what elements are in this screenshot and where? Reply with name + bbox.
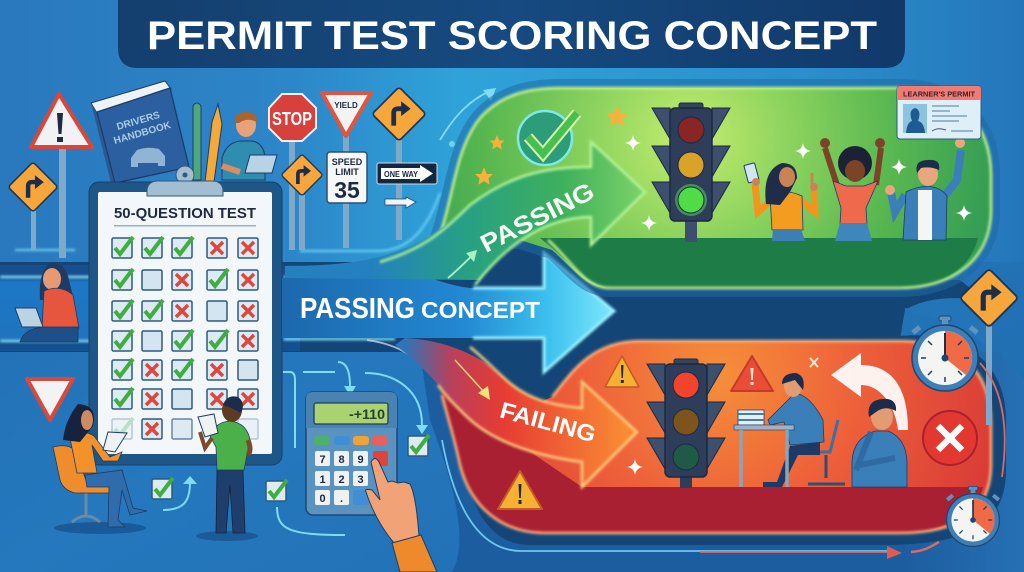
calculator keys bbox=[314, 436, 388, 505]
passing label: PASSING bbox=[476, 177, 599, 259]
sign: lower yield bbox=[27, 379, 73, 420]
sign: speed limit 35: 35 bbox=[334, 177, 360, 203]
fail x badge bbox=[923, 411, 977, 465]
calculator keys: . bbox=[340, 493, 343, 505]
sign: stop: STOP bbox=[272, 109, 312, 129]
red traffic light bbox=[647, 359, 725, 488]
calculator keys: 7 bbox=[319, 454, 326, 466]
calculator keys: 9 bbox=[357, 454, 364, 466]
clipboard bbox=[89, 166, 282, 465]
sign: speed limit 35 bbox=[327, 152, 367, 203]
sign: speed limit 35: SPEED bbox=[332, 157, 363, 167]
learner's permit card bbox=[897, 86, 981, 139]
learner's permit card: LEARNER'S PERMIT bbox=[903, 90, 975, 98]
drivers handbook bbox=[91, 81, 189, 183]
calculator keys: 3 bbox=[357, 474, 364, 486]
test heading: 50-QUESTION TEST bbox=[114, 205, 256, 222]
celebrating man with permit bbox=[885, 138, 965, 240]
red panel bbox=[440, 341, 991, 533]
passing concept label bbox=[300, 293, 540, 325]
curved return arrow bbox=[831, 353, 908, 430]
calculator keys: 0 bbox=[319, 493, 326, 505]
loose check boxes bbox=[152, 435, 429, 501]
sign: yield: YIELD bbox=[334, 101, 358, 110]
person with tablet bbox=[222, 112, 277, 180]
celebrating woman with orange top bbox=[744, 163, 818, 241]
warning triangle red bbox=[731, 356, 773, 391]
stopwatch upper bbox=[911, 316, 979, 391]
passing concept label: PASSING bbox=[300, 293, 415, 325]
celebrating woman with coral top bbox=[820, 138, 885, 241]
answer grid bbox=[112, 237, 258, 439]
calculator keys: 2 bbox=[338, 474, 345, 486]
stars and sparkles bbox=[475, 106, 972, 231]
pointing hand and sleeve bbox=[366, 458, 437, 572]
passing concept label: CONCEPT bbox=[421, 297, 540, 323]
calculator bbox=[306, 392, 397, 515]
man in green reading bbox=[196, 396, 258, 541]
sign: warning triangle bbox=[31, 94, 92, 258]
warning triangle lower bbox=[498, 471, 542, 509]
progress lines bbox=[442, 363, 1005, 559]
sign: small turn diamond bbox=[281, 154, 323, 250]
green panel bbox=[440, 86, 991, 288]
blue stream arrow bbox=[282, 253, 614, 372]
woman in chair reading bbox=[53, 404, 147, 534]
navy flow behind panels bbox=[0, 210, 1006, 545]
sign: left turn diamond bbox=[8, 162, 58, 250]
drivers handbook: HANDBOOK bbox=[113, 120, 173, 147]
stopwatch lower bbox=[946, 486, 1000, 546]
failing arrow bbox=[395, 338, 637, 487]
warning triangle small bbox=[605, 356, 639, 387]
sign: yield bbox=[322, 93, 371, 248]
green traffic light bbox=[652, 103, 730, 242]
road sign right bbox=[960, 269, 1018, 425]
left band bbox=[0, 265, 300, 351]
sparkle bbox=[627, 459, 643, 475]
person studying at desk bbox=[734, 373, 845, 487]
small x bbox=[810, 358, 818, 367]
pencils bbox=[193, 103, 222, 182]
clipboard clip bbox=[147, 166, 223, 196]
title banner: PERMIT TEST SCORING CONCEPT bbox=[147, 14, 877, 58]
calculator keys: 1 bbox=[319, 474, 326, 486]
check badge bbox=[518, 111, 577, 165]
calculator keys: 8 bbox=[338, 454, 345, 466]
sign: speed limit 35: LIMIT bbox=[335, 167, 359, 177]
flow arrows near calculator bbox=[163, 362, 428, 535]
sad person bbox=[852, 399, 907, 487]
sign: stop bbox=[269, 94, 316, 250]
sign: one way: ONE WAY bbox=[384, 169, 418, 179]
passing arrow bbox=[285, 142, 645, 285]
title banner bbox=[118, 0, 905, 68]
sign: curved road diamond bbox=[372, 87, 426, 240]
drivers handbook: DRIVERS bbox=[116, 110, 162, 133]
glow lines bbox=[0, 88, 496, 398]
failing label: FAILING bbox=[497, 397, 599, 447]
woman with laptop bbox=[15, 263, 79, 342]
calculator display: -+110 bbox=[349, 406, 385, 422]
sign: one way bbox=[377, 163, 437, 208]
